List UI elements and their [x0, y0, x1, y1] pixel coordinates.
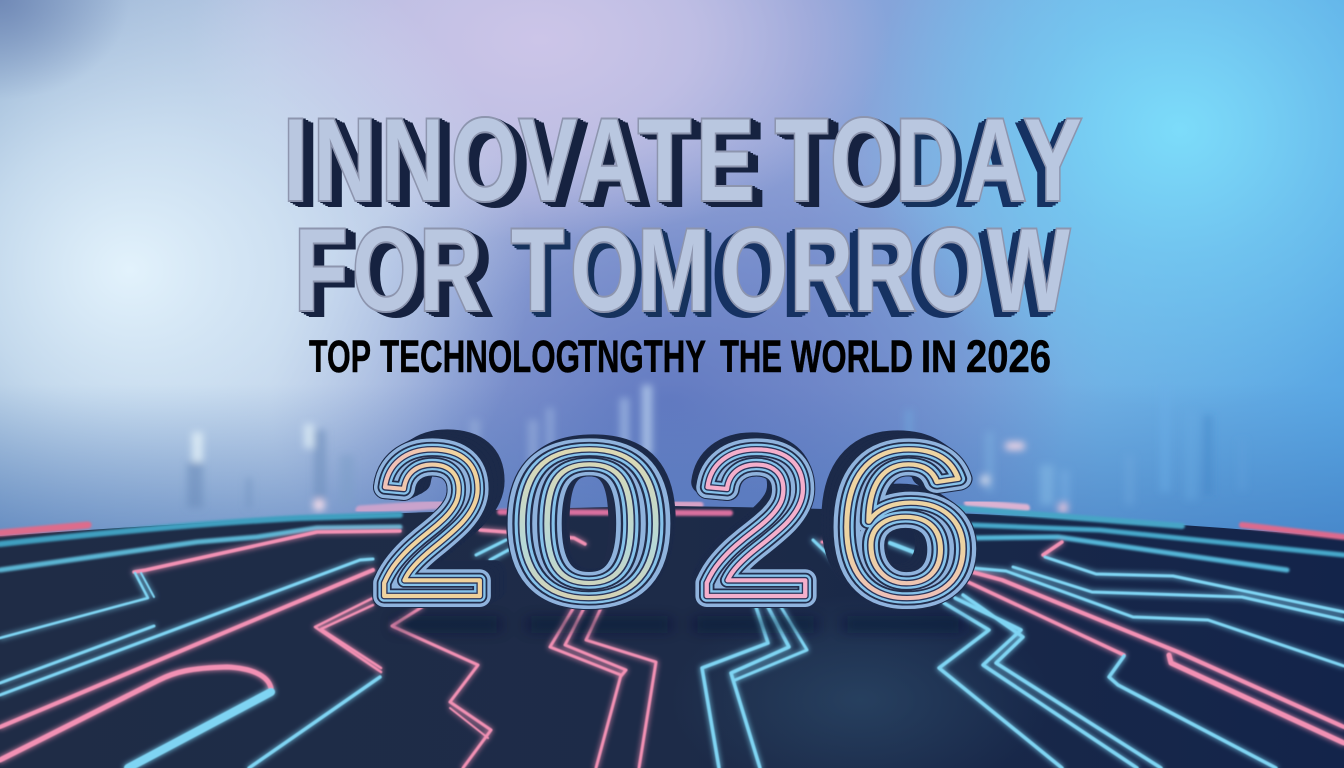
digit 6: 6: [834, 407, 974, 641]
digit 0: 0: [511, 406, 667, 641]
title extrusion, left: [720, 94, 1082, 335]
horizon glow bands: [360, 503, 1026, 510]
digit 2 (first): 2: [374, 406, 490, 641]
digit 6: 6: [834, 407, 974, 641]
subtitle: TOP: [309, 331, 371, 382]
digit 2 (second): 2: [696, 407, 816, 641]
subtitle: TNGTHY: [578, 331, 706, 382]
digit 6: 6: [834, 407, 974, 641]
year base: 2026: [374, 406, 961, 641]
digit 0: 0: [511, 406, 667, 641]
title extrusion, slight right: D: [895, 94, 958, 225]
neon circuit traces: left: [0, 530, 656, 768]
far circuit traces: [0, 508, 1344, 570]
neon circuit traces: right: [702, 540, 1344, 768]
subtitle: WORLD: [791, 331, 913, 382]
title extrusion, slight right: [511, 94, 958, 335]
subtitle: [309, 331, 1051, 382]
digit contact shadows: [394, 620, 963, 629]
subtitle: TECHNOLOG: [380, 331, 580, 382]
digit 2 (second): 2: [696, 407, 816, 641]
digit 6: 6: [834, 407, 974, 641]
title: INNOVATE TODAY FOR TOMORROW: [283, 94, 1082, 335]
title extrusion, slight right: TOM: [511, 204, 710, 335]
digit 2 (first): 2: [374, 406, 490, 641]
digit 0: 0: [511, 406, 667, 641]
blurred city skyline: [187, 382, 1246, 513]
digit 2 (second): 2: [696, 407, 816, 641]
subtitle: 2026: [966, 331, 1051, 382]
dark circuit floor: [0, 506, 1344, 768]
digit 6: 6: [834, 407, 974, 641]
digit 2 (first): 2: [374, 406, 490, 641]
digit 2 (second): 2: [696, 407, 816, 641]
digit 6: 6: [834, 407, 974, 641]
title line one: INNOVATE TODAY: [283, 94, 1082, 225]
title extrusion, left: OW: [918, 204, 1070, 335]
digit 2 (second): 2: [696, 407, 816, 641]
title extrusion, left: ORR: [720, 204, 916, 335]
title extrusion, strong right: FOR: [295, 204, 482, 335]
digit 2 (first): 2: [374, 406, 490, 641]
3D striped year 2026: [374, 406, 974, 641]
digit 0: 0: [511, 406, 667, 641]
title extrusion, left: AY: [964, 94, 1082, 225]
subtitle: THE: [720, 331, 782, 382]
digit 0: 0: [511, 406, 667, 641]
subtitle: IN: [921, 331, 957, 382]
title extrusion, strong right: [283, 94, 898, 335]
title extrusion, strong right: INNOVATE: [283, 94, 754, 225]
digit 2 (first): 2: [374, 406, 490, 641]
digit 0: 0: [511, 406, 667, 641]
digit 2 (second): 2: [696, 407, 816, 641]
digit 2 (first): 2: [374, 406, 490, 641]
title extrusion, strong right: TO: [775, 94, 898, 225]
title line two: FOR TOMORROW: [295, 204, 1070, 335]
